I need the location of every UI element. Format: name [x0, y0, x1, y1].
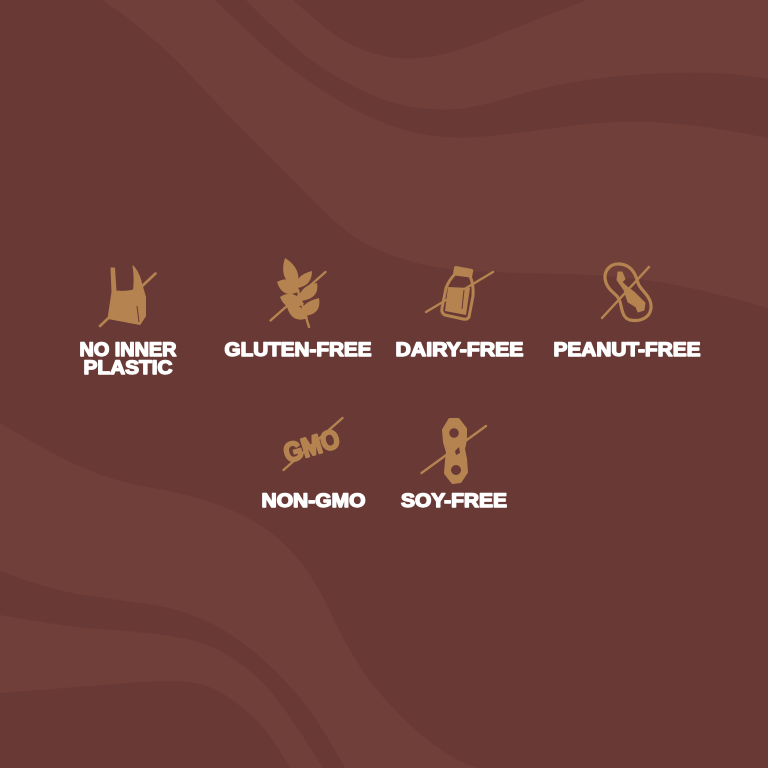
- background waves: bottom left: [0, 423, 478, 768]
- icon: crossed-out soy pod: [422, 420, 486, 482]
- icon: crossed-out GMO: GMO: [280, 423, 343, 469]
- badge: gluten-free: [224, 258, 372, 361]
- label: soy-free: SOY-FREE: [401, 491, 507, 512]
- icon: crossed-out peanut: [602, 264, 651, 320]
- badge: non-gmo: [262, 418, 366, 512]
- badge: peanut-free: [554, 264, 700, 361]
- label: no inner plastic: PLASTIC: [84, 358, 173, 379]
- badge: dairy-free: [396, 266, 524, 361]
- label: gluten-free: GLUTEN-FREE: [224, 340, 372, 361]
- label: dairy-free: DAIRY-FREE: [396, 340, 524, 361]
- icon: crossed-out wheat: [270, 258, 326, 327]
- label: non-gmo: NON-GMO: [262, 491, 366, 512]
- badge: soy-free: [401, 420, 507, 512]
- label: no inner plastic: [80, 340, 177, 379]
- icon: crossed-out plastic bag: [100, 266, 156, 326]
- icon: crossed-out milk bottle: [426, 266, 493, 319]
- background waves: top right: [103, 0, 768, 308]
- label: peanut-free: PEANUT-FREE: [554, 340, 700, 361]
- badge: no inner plastic: [80, 266, 177, 379]
- label: no inner plastic: NO INNER: [80, 340, 177, 361]
